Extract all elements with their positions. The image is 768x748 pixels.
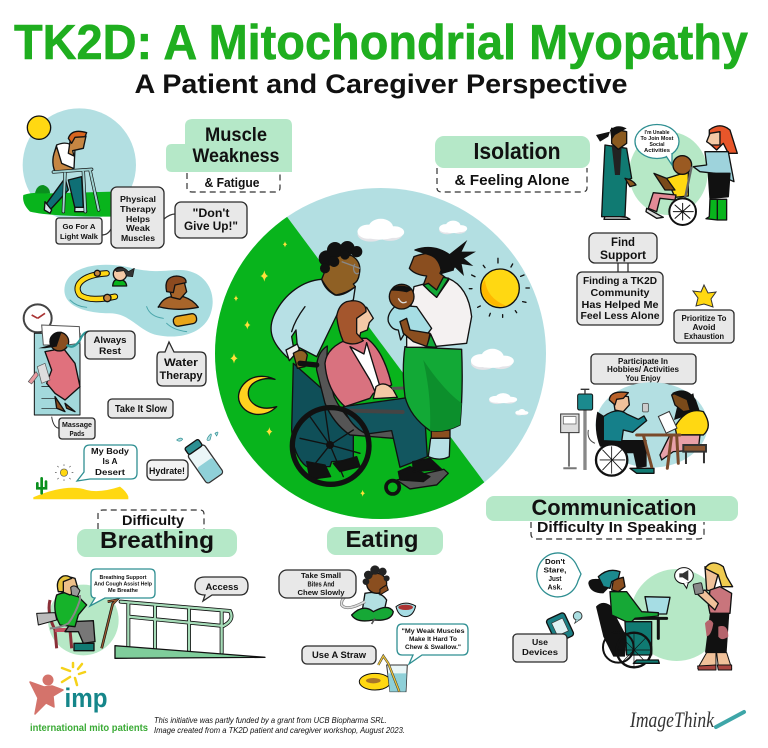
label: hobbies: Hobbies/ Activities — [607, 365, 680, 374]
heading: eating — [327, 526, 443, 555]
label: prioritize: Exhaustion — [684, 332, 724, 341]
label: massage pads: Pads — [70, 431, 85, 438]
speech bubble: unable to join: To Join Most — [640, 136, 674, 142]
label: take small bites: Bites And — [308, 580, 335, 588]
label: take small bites — [279, 570, 356, 598]
heading: eating: Eating — [346, 526, 418, 552]
label: go for a light walk: Light Walk — [60, 232, 99, 241]
speech bubble: unable to join: Social — [650, 142, 665, 148]
callout: don't give up — [175, 202, 247, 238]
speech bubble: don't stare: Just — [548, 574, 562, 583]
speech bubble: don't stare: Stare, — [544, 566, 566, 574]
label: physical therapy: Helps — [126, 215, 151, 224]
heading: difficulty breathing: Difficulty — [122, 512, 184, 528]
heading: muscle weakness: Weakness — [192, 146, 280, 167]
label: water therapy: Therapy — [160, 370, 203, 382]
label: massage pads: Massage — [62, 422, 92, 429]
icon: phone device — [546, 612, 582, 643]
label: take it slow — [108, 399, 173, 418]
illustration: woman resting in bed — [24, 304, 89, 428]
label: take small bites: Take Small — [301, 571, 341, 580]
illustration: wheelchair ramp — [115, 602, 265, 658]
callout: my body is a desert: Desert — [95, 467, 125, 477]
label: access — [195, 577, 248, 601]
label: find support: Find — [611, 235, 635, 249]
text block: finding a TK2D community: Community — [590, 287, 650, 299]
speech bubble: don't stare: Don't — [545, 557, 566, 566]
man standing behind wheelchair — [271, 241, 362, 479]
footer note: Image created from a TK2D patient and caregiver workshop, August 2023. — [154, 726, 405, 735]
speech bubble: unable to join: I'm Unable — [644, 130, 670, 136]
title: TK2D: A Mitochondrial Myopathy — [14, 16, 748, 70]
callout: don't give up: "Don't — [192, 208, 230, 220]
label: access: Access — [206, 582, 238, 593]
heading: difficulty breathing — [77, 510, 237, 557]
heading: difficulty breathing: Breathing — [100, 527, 214, 553]
speech bubble: don't stare — [537, 553, 581, 597]
illustration: three people isolation scene — [596, 126, 737, 225]
label: physical therapy: Muscles — [121, 234, 156, 243]
label: prioritize — [674, 310, 734, 343]
label: prioritize: Prioritize To — [682, 314, 727, 323]
label: use a straw: Use A Straw — [312, 650, 367, 660]
label: physical therapy: Weak — [126, 224, 151, 233]
subheading: fatigue: & Fatigue — [204, 175, 260, 190]
callout: my body is a desert: My Body — [91, 446, 129, 456]
label: always rest: Always — [94, 335, 126, 346]
speech bubble: unable to join: Activities — [644, 148, 670, 154]
speech bubble: weak muscles — [397, 624, 468, 664]
label: go for a light walk — [56, 218, 102, 244]
signature: ImageThink: ImageThink — [629, 707, 715, 732]
label: take it slow: Take It Slow — [115, 404, 167, 415]
logo: international mito patients: international mito patients — [30, 722, 148, 734]
label: hydrate — [147, 460, 188, 480]
label: massage pads — [59, 418, 95, 439]
label: take small bites: Chew Slowly — [298, 588, 345, 597]
label: find support: Support — [600, 248, 646, 262]
footer note: This initiative was partly funded by a grant from UCB Biopharma SRL. — [154, 716, 387, 725]
text block: finding a TK2D community: Feel Less Alone — [580, 310, 660, 322]
wheelchair and seated woman — [292, 301, 448, 494]
illustration: hobbies at table with IV pole — [561, 382, 708, 476]
speech bubble: weak muscles: "My Weak Muscles — [402, 628, 465, 635]
label: water therapy — [157, 342, 206, 386]
callout: my body is a desert — [77, 445, 137, 481]
central illustration: family in day and night circle — [215, 188, 546, 519]
icon: star — [693, 285, 716, 307]
speech bubble: breathing support: Me Breathe — [108, 588, 139, 594]
label: use devices: Devices — [522, 647, 558, 657]
text block: finding a TK2D community: Finding a TK2D — [583, 275, 657, 287]
footer note — [154, 716, 405, 735]
speech bubble: weak muscles: Make It Hard To — [409, 636, 457, 643]
label: hobbies: Participate In — [618, 357, 668, 366]
heading: muscle weakness: Muscle — [205, 125, 267, 146]
subheading: fatigue — [187, 173, 280, 192]
text block: finding a TK2D community: Has Helped Me — [582, 299, 659, 311]
label: go for a light walk: Go For A — [62, 222, 96, 231]
label: hydrate: Hydrate! — [149, 466, 185, 477]
label: always rest: Rest — [99, 346, 122, 357]
illustration: man with walker — [23, 108, 136, 222]
speech bubble: breathing support: Breathing Support — [100, 575, 147, 581]
label: use devices: Use — [532, 637, 548, 647]
text block: finding a TK2D community — [577, 272, 663, 325]
label: use devices — [513, 634, 567, 662]
heading: isolation — [435, 136, 590, 168]
heading: isolation: Isolation — [474, 138, 560, 164]
woman holding baby — [388, 240, 476, 459]
subheading: feeling alone — [437, 168, 587, 192]
heading: communication — [486, 495, 738, 521]
label: always rest — [85, 331, 135, 359]
illustration: boy eating — [341, 565, 416, 624]
speech bubble: weak muscles: Chew & Swallow." — [405, 644, 461, 651]
logo: international mito patients: imp — [64, 683, 108, 713]
subheading: feeling alone: & Feeling Alone — [454, 172, 570, 189]
callout: don't give up: Give Up!" — [184, 221, 238, 233]
heading: communication: Communication — [532, 495, 696, 520]
label: physical therapy: Physical — [120, 195, 156, 204]
label: hobbies — [591, 354, 696, 384]
illustration: person with breathing support — [37, 576, 119, 655]
speech bubble: unable to join — [635, 124, 679, 165]
icon: speaker speech bubble — [675, 568, 693, 588]
heading: muscle weakness — [166, 119, 292, 172]
icon: water bottle — [177, 432, 224, 484]
label: hobbies: You Enjoy — [626, 374, 661, 383]
subtitle: A Patient and Caregiver Perspective — [134, 69, 628, 99]
speech bubble: don't stare: Ask. — [548, 582, 562, 592]
label: prioritize: Avoid — [692, 323, 716, 332]
subheading: difficulty in speaking: Difficulty In Speaking — [537, 520, 697, 536]
label: physical therapy — [102, 187, 175, 248]
callout: my body is a desert: Is A — [102, 456, 118, 466]
speech bubble: breathing support: And Cough Assist Help — [94, 582, 152, 588]
illustration: wheelchair user with laptop and standing woman — [588, 563, 733, 670]
logo: international mito patients — [30, 663, 148, 734]
illustration: desert — [33, 464, 128, 499]
label: physical therapy: Therapy — [120, 205, 157, 214]
speech bubble: breathing support — [90, 569, 155, 606]
label: water therapy: Water — [164, 357, 199, 369]
label: use a straw — [302, 646, 376, 664]
illustration: water therapy pool — [64, 265, 213, 337]
illustration: plate and drink with straw — [359, 656, 407, 692]
label: find support — [589, 233, 657, 272]
